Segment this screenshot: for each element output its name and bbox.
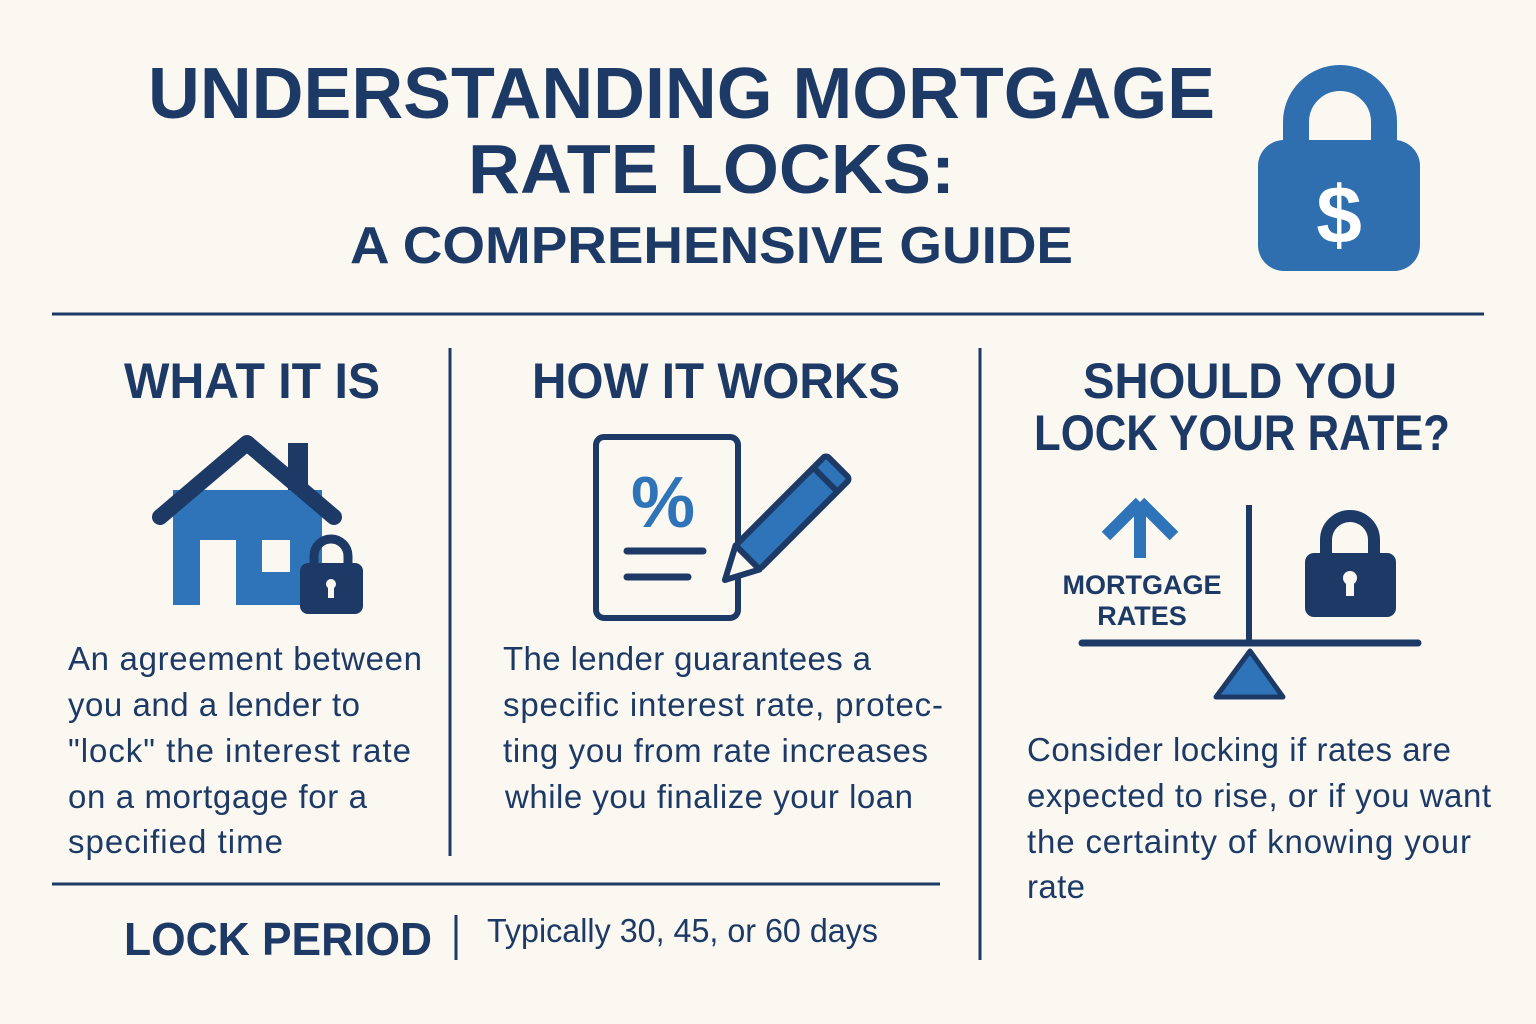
text: should you lock body: [1027, 731, 1491, 905]
lock period row: LOCK PERIOD: [124, 913, 432, 965]
text: what it is body: on a mortgage for a: [68, 778, 368, 815]
text: how it works body: The lender guarantees a: [503, 640, 872, 677]
icon: padlock with dollar: [1258, 78, 1420, 271]
heading: what it is: WHAT IT IS: [124, 353, 380, 409]
text: what it is body: "lock" the interest rate: [68, 732, 411, 769]
heading: should you lock: SHOULD YOU: [1083, 353, 1397, 409]
icon: balance scale: [1062, 502, 1418, 697]
icon: balance scale: MORTGAGE: [1062, 570, 1222, 600]
title: A COMPREHENSIVE GUIDE: [350, 217, 1073, 275]
heading: should you lock: LOCK YOUR RATE?: [1034, 405, 1450, 461]
heading: should you lock: [1034, 353, 1450, 461]
heading: how it works: HOW IT WORKS: [532, 353, 900, 409]
text: what it is body: [68, 640, 422, 860]
lock period row: Typically 30, 45, or 60 days: [487, 912, 878, 949]
text: should you lock body: expected to rise, or if you want: [1027, 777, 1491, 814]
title: UNDERSTANDING MORTGAGE: [148, 54, 1215, 134]
icon: document with pencil: [596, 437, 850, 618]
text: should you lock body: rate: [1027, 868, 1085, 905]
icon: document with pencil: %: [631, 463, 695, 543]
title: [148, 54, 1215, 275]
text: how it works body: [503, 640, 943, 815]
lock period row: [124, 912, 878, 965]
panel: what it is: [68, 353, 422, 860]
text: should you lock body: Consider locking if rates are: [1027, 731, 1451, 768]
icon: balance scale: RATES: [1097, 601, 1187, 631]
icon: padlock with dollar: $: [1316, 170, 1362, 261]
icon: house with lock: [160, 443, 363, 614]
text: should you lock body: the certainty of knowing your: [1027, 823, 1471, 860]
title: RATE LOCKS:: [468, 130, 955, 208]
text: how it works body: while you finalize your loan: [504, 778, 913, 815]
text: how it works body: specific interest rate, protec-: [503, 686, 943, 723]
panel: should you lock: [1027, 353, 1491, 905]
text: what it is body: An agreement between: [68, 640, 422, 677]
panel: how it works: [503, 353, 943, 815]
text: how it works body: ting you from rate increases: [503, 732, 928, 769]
text: what it is body: specified time: [68, 823, 283, 860]
text: what it is body: you and a lender to: [68, 686, 360, 723]
